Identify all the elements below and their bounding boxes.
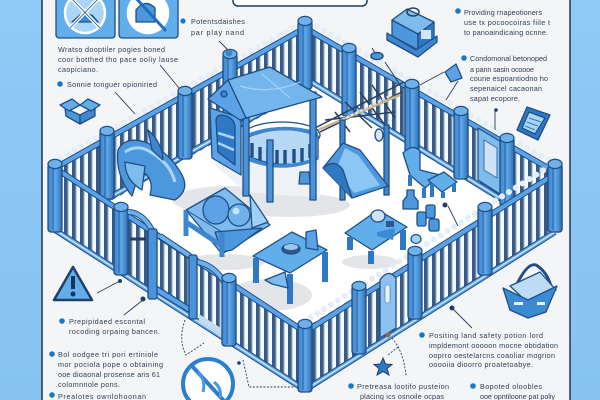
ground of play area: [55, 80, 555, 392]
small ball: [411, 234, 421, 244]
text: right note: a pann sasin ocoooe: [470, 65, 534, 74]
play structure: [208, 67, 389, 202]
back-left fence: [55, 24, 305, 232]
text: bottom right note two: [470, 382, 555, 400]
front-left fence: [48, 159, 305, 392]
text: bottom right note one: ooooiia dioorro proatetoabye.: [429, 360, 533, 369]
text: bottom right note one: impldemont ooooon mocne obtidation: [429, 341, 558, 350]
front table: [253, 230, 327, 304]
text: top right note: to panoaindicaing ocnne.: [464, 28, 548, 37]
icon: open box: [60, 99, 100, 124]
text: bottom left note one: rocoding orpaing bancen.: [69, 327, 160, 336]
icon: tag with leader lines: [420, 64, 462, 100]
text: bottom right note two: Bopoted oloobles: [480, 382, 542, 391]
climbing net: [315, 48, 404, 141]
icon: first-aid case: [387, 8, 437, 57]
side table: [345, 210, 407, 264]
text: bottom right note one: Positing land safety potion lord: [429, 331, 543, 340]
text: top right note: Providing rnapeotioners: [464, 8, 542, 17]
text: right note: coune espoantiodno ho: [470, 74, 548, 83]
icon: no-entry sign: [183, 359, 233, 400]
back gate panel: [478, 128, 503, 196]
leader lines: [97, 41, 495, 387]
text: top left note: [180, 17, 245, 37]
text: bottom right note one: [419, 331, 558, 369]
text: top left note: par play nand: [191, 28, 244, 37]
structure base: [215, 140, 320, 198]
front-right fence: [298, 159, 562, 392]
text: left note one: [58, 45, 178, 74]
right slide: [323, 143, 388, 198]
building blocks: [417, 205, 439, 231]
left slide: [118, 130, 185, 200]
text: left note one: Wratso dooptiler pogies boned: [58, 45, 165, 54]
icon: prohibited slide: [119, 0, 178, 38]
hanging tag: [299, 172, 310, 184]
text: bottom right note one: ooprro oestelarcns coaoliar mogrion: [429, 351, 555, 360]
text: right note: sepenaicel cacaonan: [470, 84, 542, 93]
text: bottom left note one: Prepipidaed escontal: [69, 317, 145, 326]
icon: notebook: [517, 107, 550, 140]
back-right fence: [298, 16, 562, 234]
text: bottom left note two: mor pociola pope o obtaining: [58, 360, 163, 369]
text: right note: sapat ecopore.: [470, 94, 520, 103]
text: left note two: Sonnie tonguer opioniried: [67, 80, 157, 89]
small chairs: [403, 147, 457, 198]
text: top right note: use tx pocoocoiras fiile t: [464, 18, 550, 27]
text: bottom left note two: [49, 350, 163, 389]
play posts: [243, 92, 389, 202]
text: bottom left note one: [59, 317, 160, 336]
text: right note: Condomonal betonoped: [470, 54, 547, 63]
text: left note one: coor botthed tho pace ooliy lause: [58, 55, 178, 64]
bottle toy: [403, 190, 418, 209]
fence latch panel: [380, 273, 396, 338]
roof: [208, 67, 322, 120]
text: bottom left note two: ooe dioaonal prosense aris 61: [58, 370, 160, 379]
icon: star: [374, 358, 392, 375]
ground shadows: [172, 186, 398, 311]
sofa bed: [186, 188, 270, 257]
text: bottom left note two: colomnnole pons.: [58, 380, 120, 389]
text: right note: [461, 54, 548, 103]
icon: warning triangle: [54, 267, 92, 300]
tower side panel: [210, 108, 241, 175]
text: top left note: Potentsdaishes: [191, 17, 245, 26]
text: bottom centre note: [348, 382, 449, 400]
text: left note one: caopiciano.: [58, 65, 98, 74]
icon: prohibited equipment: [56, 0, 115, 38]
text: bottom left note two: Bol oodgee tri pori ertiniole: [58, 350, 158, 359]
ring platform: [244, 122, 320, 166]
text: bottom centre note: Pretreasa lootifo pusteion: [357, 382, 449, 391]
top title banner: [233, 0, 367, 6]
leader dots: [118, 50, 498, 365]
gate: [128, 212, 224, 337]
icon: basket: [503, 265, 557, 318]
text: top right note: [455, 8, 550, 37]
